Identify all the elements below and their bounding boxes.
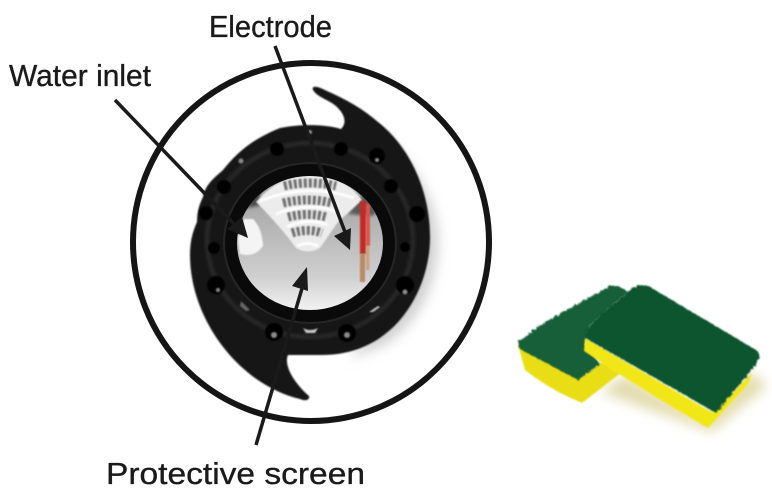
label: Protective screen: Protective screen bbox=[106, 456, 365, 491]
back sponge bbox=[518, 286, 628, 403]
housing shadow bbox=[350, 130, 438, 358]
front sponge yellow side bbox=[584, 338, 752, 428]
arrow: protective screen bbox=[256, 267, 308, 445]
label: Water inlet: Water inlet bbox=[9, 58, 151, 93]
device: black spiral housing with lens bbox=[190, 87, 438, 400]
housing highlight ring bbox=[207, 143, 413, 337]
circle outline bbox=[133, 63, 489, 421]
front sponge bbox=[584, 285, 759, 428]
white cone nozzle bbox=[256, 175, 362, 252]
spiral housing body bbox=[190, 87, 430, 400]
electrode wires bbox=[360, 201, 366, 254]
screw highlights bbox=[216, 130, 408, 338]
lens contents bbox=[235, 175, 388, 282]
housing screw holes bbox=[199, 142, 425, 342]
sponges bbox=[518, 285, 768, 432]
dark upper corners bbox=[247, 194, 262, 210]
arrow: water inlet bbox=[115, 100, 248, 238]
sponge shadow bbox=[600, 372, 768, 432]
cone ridges bbox=[283, 183, 336, 233]
arrow: electrode bbox=[275, 46, 351, 250]
back sponge green top bbox=[518, 286, 628, 380]
lens bbox=[237, 176, 383, 310]
water inlet tube bbox=[238, 219, 263, 255]
label: Electrode: Electrode bbox=[209, 9, 332, 44]
inner dark bezel bbox=[224, 163, 396, 323]
front sponge green top bbox=[585, 285, 759, 413]
bezel slots bbox=[240, 301, 380, 333]
back sponge yellow side bbox=[518, 345, 622, 403]
